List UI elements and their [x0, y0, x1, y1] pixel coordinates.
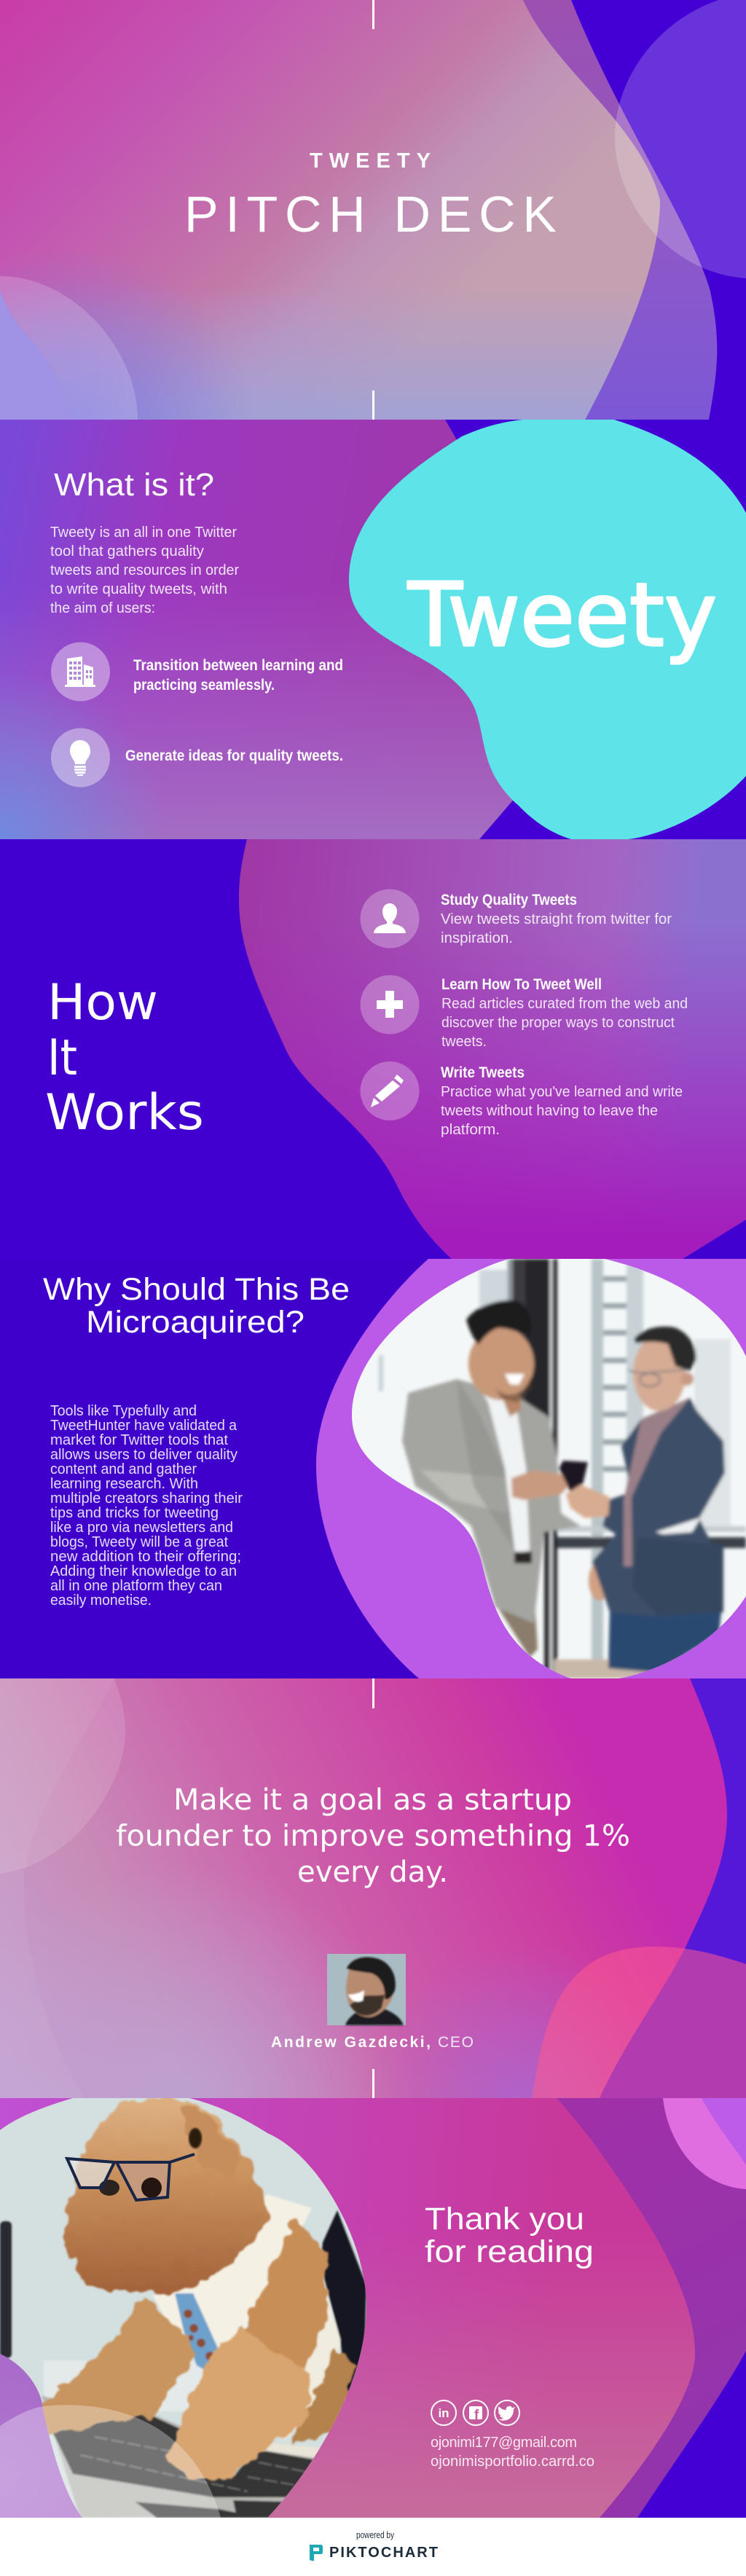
product name: Tweety: [407, 565, 717, 667]
benefit one: [133, 657, 343, 694]
step three text: Write Tweets: [441, 1064, 525, 1081]
bottom tick line: [372, 390, 374, 420]
main gradient blob: [0, 0, 660, 420]
vest front: [153, 2194, 312, 2360]
main gradient blob: [0, 2098, 695, 2518]
body paragraph: easily monetise.: [50, 1593, 152, 1609]
dark chair: [321, 2210, 366, 2400]
left lighter band: [0, 1678, 114, 2098]
heading: Microaquired?: [86, 1305, 305, 1340]
heading: Why Should This Be: [43, 1272, 350, 1307]
teal blob: [349, 420, 746, 839]
body paragraph: blogs, Tweety will be a great: [50, 1534, 228, 1550]
body paragraph: like a pro via newsletters and: [50, 1520, 233, 1536]
contact details: ojonimisportfolio.carrd.co: [431, 2454, 594, 2470]
phone and hands: [511, 1470, 577, 1500]
icon: pencil: [360, 1061, 420, 1120]
left bottom purple area: [0, 2346, 91, 2518]
top tick line: [372, 1678, 374, 1708]
heading: [425, 2202, 594, 2269]
translucent overlay on keyboard: [0, 2405, 221, 2518]
top-right lilac blob: [663, 2098, 746, 2189]
keyboard: [42, 2395, 326, 2518]
step three text: tweets without having to leave the: [441, 1103, 658, 1119]
body paragraph: Tools like Typefully and: [50, 1403, 197, 1419]
top-left translucent circle: [0, 1678, 125, 1874]
head fur: [64, 2099, 267, 2299]
step one text: inspiration.: [441, 930, 513, 946]
step two text: discover the proper ways to construct: [441, 1015, 675, 1031]
icon: piktochart logo: [310, 2545, 323, 2561]
heading: [45, 974, 204, 1142]
intro paragraph: tweets and resources in order: [50, 562, 239, 578]
navy suit man jacket: [592, 1398, 725, 1616]
subtitle: TWEETY: [310, 149, 431, 173]
intro paragraph: to write quality tweets, with: [50, 581, 227, 597]
step two text: Learn How To Tweet Well: [441, 976, 602, 993]
lower-left blue wedge: [0, 290, 71, 420]
heading: What is it?: [54, 467, 214, 503]
body fur: [237, 2218, 328, 2368]
quote text: every day.: [297, 1856, 448, 1889]
step three text: platform.: [441, 1122, 500, 1138]
footer: powered by piktochart: PIKTOCHART: [329, 2545, 438, 2561]
bottom-left translucent circle: [0, 276, 138, 420]
icon: user: [360, 889, 420, 949]
photo: dog with glasses at keyboard: [0, 2098, 372, 2518]
gradient background blob: [0, 1678, 727, 2098]
heading: How: [47, 974, 158, 1032]
dog fur: [41, 2099, 356, 2480]
grey suit man trousers: [497, 1607, 541, 1658]
top-right lilac sliver: [702, 2098, 746, 2165]
step three text: Practice what you've learned and write: [441, 1084, 683, 1100]
quote text: founder to improve something 1%: [116, 1820, 630, 1853]
body paragraph: tips and tricks for tweeting: [50, 1505, 219, 1521]
gradient background blob: [0, 420, 539, 839]
quote text: [116, 1783, 630, 1889]
benefit two: Generate ideas for quality tweets.: [125, 747, 343, 764]
panel: title cover: [0, 0, 746, 420]
vest back: [283, 2280, 342, 2440]
grey suit man shirt: [482, 1394, 532, 1555]
caption: CEO: [438, 2034, 474, 2051]
icon: facebook: f: [474, 2408, 479, 2423]
step three text: [441, 1064, 683, 1138]
heading: Works: [45, 1084, 204, 1142]
right arm: [165, 2328, 313, 2480]
glasses and face: [67, 2154, 195, 2200]
icon: twitter: [495, 2400, 519, 2425]
step one text: [441, 892, 672, 946]
step one text: Study Quality Tweets: [441, 892, 577, 908]
lilac blob: [316, 1259, 746, 1678]
panel: quote: [0, 1678, 746, 2098]
ear shadow: [189, 2128, 202, 2148]
tie: [174, 2292, 219, 2371]
navy suit man shirt: [624, 1398, 690, 1566]
title: PITCH DECK: [184, 186, 557, 243]
body paragraph: [50, 1403, 243, 1609]
bottom-right pink overlay: [532, 1947, 746, 2098]
body paragraph: learning research. With: [50, 1476, 198, 1492]
step one text: View tweets straight from twitter for: [441, 911, 672, 927]
intro paragraph: the aim of users:: [50, 600, 155, 616]
body paragraph: allows users to deliver quality: [50, 1447, 237, 1463]
body paragraph: multiple creators sharing their: [50, 1491, 243, 1507]
top tick line: [372, 0, 374, 29]
grey suit man jacket: [402, 1379, 581, 1623]
mid purple layer: [557, 2098, 746, 2518]
heading: It: [47, 1029, 77, 1087]
icon: plus: [360, 975, 420, 1034]
intro paragraph: [50, 525, 239, 616]
gradient background blob: [239, 839, 746, 1259]
caption: Andrew Gazdecki,: [271, 2034, 431, 2051]
intro paragraph: Tweety is an all in one Twitter: [50, 525, 237, 541]
panel: thank you: [0, 2098, 746, 2518]
contact details: [431, 2435, 594, 2470]
icon: linkedin: in: [438, 2406, 449, 2420]
photo: two businessmen with phone: [350, 1259, 746, 1678]
grey suit man head: [468, 1327, 534, 1400]
body paragraph: content and and gather: [50, 1461, 197, 1477]
navy suit man jeans: [608, 1612, 721, 1673]
ear: [180, 2105, 240, 2164]
heading: for reading: [425, 2234, 594, 2269]
intro paragraph: tool that gathers quality: [50, 543, 204, 559]
bottom tick line: [372, 2069, 374, 2098]
body paragraph: all in one platform they can: [50, 1578, 222, 1594]
icon: facebook: [463, 2400, 488, 2425]
contact details: ojonimi177@gmail.com: [431, 2435, 577, 2451]
left arm: [41, 2295, 198, 2435]
icon: linkedin: [431, 2400, 456, 2425]
panel: why microacquire: [0, 1259, 746, 1678]
quote text: Make it a goal as a startup: [173, 1783, 572, 1817]
body paragraph: TweetHunter have validated a: [50, 1418, 237, 1434]
rear fur: [291, 2349, 356, 2445]
icon: light bulb: [51, 729, 110, 787]
step two text: tweets.: [441, 1034, 487, 1050]
benefit one: practicing seamlessly.: [133, 677, 275, 694]
body paragraph: market for Twitter tools that: [50, 1432, 228, 1448]
panel: how it works: [0, 839, 746, 1259]
footer: powered by piktochart: [0, 2518, 746, 2576]
step two text: [441, 976, 688, 1050]
heading: [43, 1272, 350, 1340]
navy suit man head: [633, 1335, 686, 1411]
top-right translucent circle: [615, 0, 746, 278]
benefit one: Transition between learning and: [133, 657, 343, 674]
navy suit man left hand: [586, 1564, 607, 1602]
photo: portrait of Andrew Gazdecki: [327, 1954, 406, 2025]
icon: building: [51, 643, 110, 701]
step two text: Read articles curated from the web and: [441, 996, 688, 1012]
footer: powered by piktochart: powered by: [356, 2529, 394, 2540]
body paragraph: new addition to their offering;: [50, 1549, 241, 1565]
panel: what is it: [0, 420, 746, 839]
purple translucent blob: [510, 0, 717, 420]
heading: Thank you: [425, 2202, 584, 2237]
body paragraph: Adding their knowledge to an: [50, 1563, 237, 1579]
